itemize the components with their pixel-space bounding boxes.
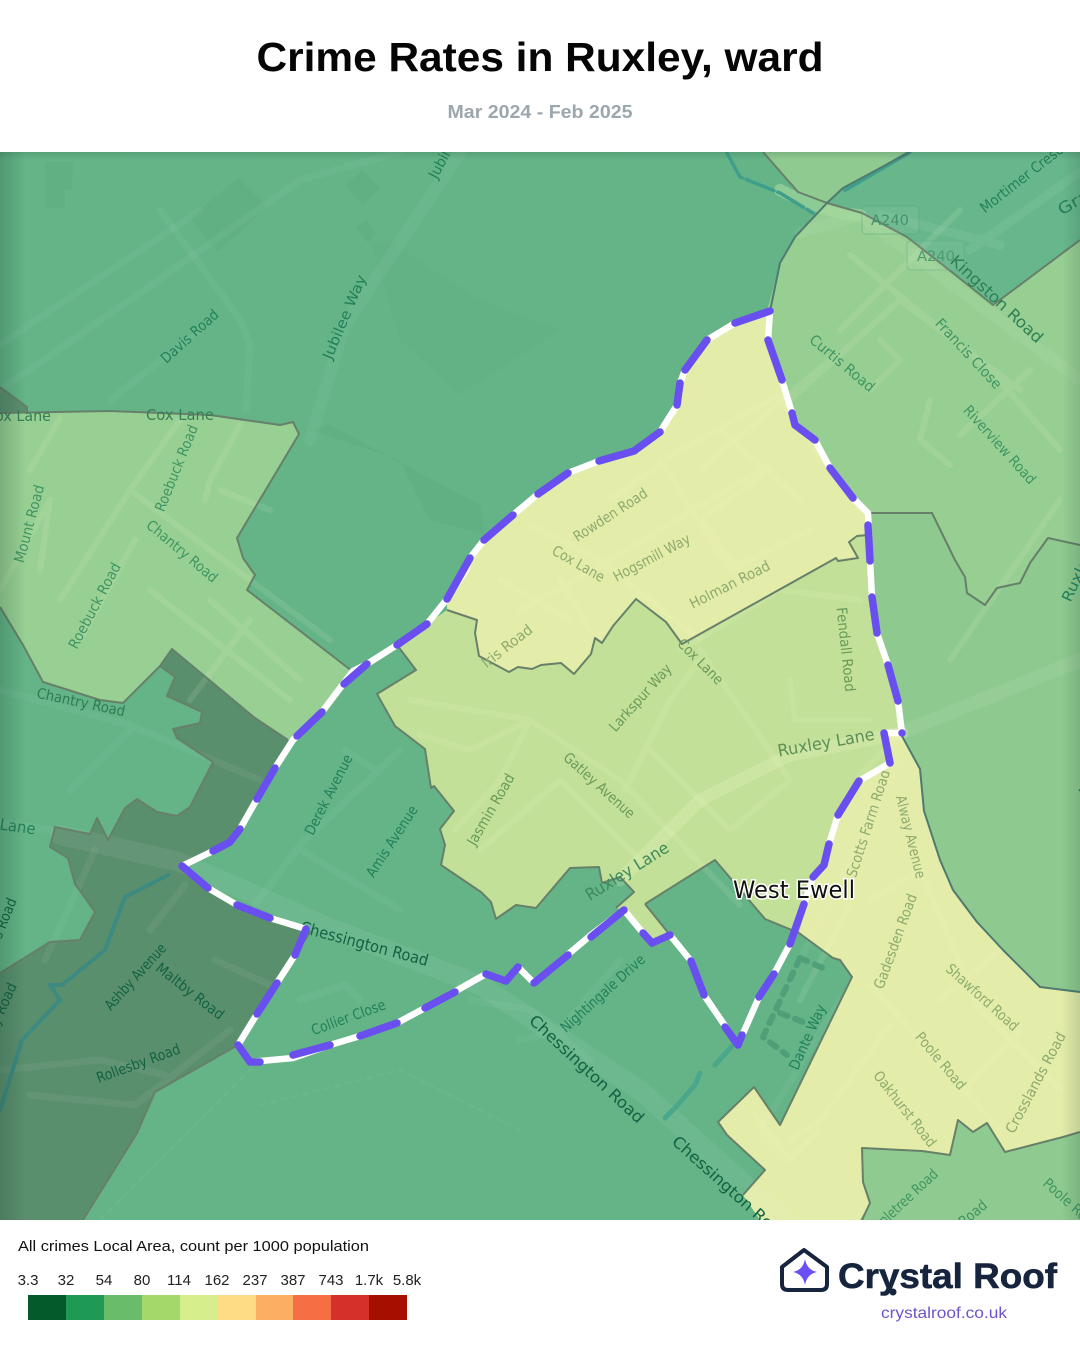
street labels: on green areas: Amis Avenue xyxy=(364,803,422,881)
street labels: major roads xyxy=(0,896,793,1246)
street labels: on ward and yellow areas: Cox Lane xyxy=(674,636,726,688)
area: ward central xyxy=(377,535,902,945)
area: small dark corner xyxy=(0,388,26,412)
street labels: on ward and yellow areas: Fendall Road xyxy=(833,606,857,693)
street labels: on light green areas: Francis Close xyxy=(931,316,1005,393)
legend scale values xyxy=(18,1272,422,1289)
legend scale values: 114 xyxy=(167,1272,191,1289)
street labels: on light green areas xyxy=(0,251,1080,1240)
street labels: on light green areas: Chantry Road xyxy=(35,686,127,720)
area: north east light green xyxy=(768,203,1080,605)
street labels: on ward and yellow areas xyxy=(464,486,1070,1151)
area: top right neighbourhood xyxy=(827,152,1080,305)
icon: house with star xyxy=(782,1250,827,1290)
legend scale values: 54 xyxy=(96,1272,112,1289)
legend scale values: 80 xyxy=(134,1272,150,1289)
street labels: on light green areas: Appletree Road xyxy=(865,1167,942,1240)
street labels: on light green areas: Roebuck Road xyxy=(66,560,125,652)
legend scale values: 387 xyxy=(280,1272,306,1289)
region borders xyxy=(0,152,1080,1220)
area: top strip, low crime band xyxy=(763,152,910,203)
street labels: major roads: Ashby Avenue xyxy=(102,941,170,1014)
logo: Crystal Roof xyxy=(782,1250,1057,1296)
street labels: on light green areas: Road xyxy=(956,1198,991,1230)
building: Dante Way hatched blocks xyxy=(763,958,823,1055)
street labels: on light green areas: Mount Road xyxy=(12,483,48,565)
street labels: on ward and yellow areas: Larkspur Way xyxy=(607,661,676,735)
street labels: major roads: Chessington Road xyxy=(668,1132,793,1246)
street labels: on ward and yellow areas: Holman Road xyxy=(687,558,773,613)
street labels: on green areas: Davis Road xyxy=(158,307,222,367)
street labels: on ward and yellow areas: Shawford Road xyxy=(942,961,1021,1035)
street labels: on green areas: Collier Close xyxy=(309,997,388,1039)
street labels: major roads: Maltby Road xyxy=(152,960,227,1023)
area: east green xyxy=(868,513,1080,992)
street labels: on ward and yellow areas: Rowden Road xyxy=(571,486,651,546)
street labels: on ward and yellow areas: Gadesden Road xyxy=(872,892,921,991)
street labels: on ward and yellow areas: Ruxley Lane xyxy=(582,838,672,905)
street labels: on green areas: Jubilee Way xyxy=(320,272,370,363)
street labels: on green areas: Jubilee xyxy=(426,133,462,182)
legend title: All crimes Local Area, count per 1000 population xyxy=(18,1238,369,1255)
legend scale values: 743 xyxy=(318,1272,344,1289)
road shields: A240: A240 xyxy=(917,249,955,265)
street labels: on ward and yellow areas: Iris Road xyxy=(479,622,536,672)
legend scale values: 32 xyxy=(58,1272,74,1289)
legend scale values: 162 xyxy=(204,1272,230,1289)
road shields: A240 xyxy=(862,206,964,270)
street labels: major roads: Chessington Road xyxy=(298,917,431,970)
road shields: A240: A240 xyxy=(871,213,909,229)
street labels: on light green areas: Chantry Road xyxy=(143,518,220,586)
street labels: on ward and yellow areas: Oakhurst Road xyxy=(870,1068,939,1151)
street labels: major roads: Rollesby Road xyxy=(95,1042,183,1087)
map edge vignette xyxy=(0,152,1080,1220)
street labels: on green areas xyxy=(0,129,1080,1073)
legend scale values: 3.3 xyxy=(18,1272,38,1289)
legend scale values: 5.8k xyxy=(393,1272,422,1289)
legend colour bar xyxy=(28,1295,407,1320)
street labels: on ward and yellow areas: Poole Road xyxy=(911,1029,969,1093)
street labels: major roads: Chessington Road xyxy=(525,1011,648,1127)
area: dark high-density block xyxy=(0,649,312,1220)
street labels: on light green areas: Cox Lane xyxy=(146,406,214,424)
area: west light green xyxy=(0,411,352,740)
street labels: on ward and yellow areas: Alway Avenue xyxy=(892,794,928,880)
street labels: on ward and yellow areas: Gatley Avenue xyxy=(560,750,638,822)
ward boundary: white line with purple dashes xyxy=(182,311,902,1062)
street labels: on light green areas: Kingston Road xyxy=(946,251,1047,347)
street labels: on light green areas: Riverview Road xyxy=(960,403,1038,488)
area: south east pale yellow xyxy=(718,733,1080,1220)
place label: West Ewell: West Ewell xyxy=(733,876,855,904)
street labels: on light green areas: Curtis Road xyxy=(806,332,877,396)
legend scale values: 1.7k xyxy=(355,1272,384,1289)
street labels: on green areas: Nightingale Drive xyxy=(558,952,649,1036)
subtitle: date range: Mar 2024 - Feb 2025 xyxy=(448,102,632,122)
area: ward north pale yellow xyxy=(447,311,868,674)
street labels: on ward and yellow areas: Cox Lane xyxy=(549,543,607,586)
street labels: on light green areas: Roebuck Road xyxy=(153,423,202,514)
street labels: on ward and yellow areas: Ruxley Lane xyxy=(776,725,876,760)
street labels: on ward and yellow areas: Crosslands Road xyxy=(1003,1030,1070,1136)
area: park shading xyxy=(45,162,560,535)
street labels: on ward and yellow areas: Scotts Farm Road xyxy=(844,768,894,879)
legend scale values: 237 xyxy=(242,1272,268,1289)
website url: crystalroof.co.uk xyxy=(881,1305,1008,1322)
wordmark: Crystal Roof xyxy=(838,1257,1057,1296)
street labels: on ward and yellow areas: Jasmin Road xyxy=(464,771,518,849)
title: Crime Rates in Ruxley, ward xyxy=(256,34,824,80)
area: south east green xyxy=(860,1120,1080,1220)
street labels: on ward and yellow areas: Hogsmill Way xyxy=(611,531,694,585)
roads: faint street network xyxy=(0,152,1080,1225)
street labels: on green areas: Dante Way xyxy=(787,1002,830,1073)
streams xyxy=(0,152,910,1118)
street labels: on green areas: Derek Avenue xyxy=(302,752,357,838)
icon: key tail on y xyxy=(890,1288,896,1296)
